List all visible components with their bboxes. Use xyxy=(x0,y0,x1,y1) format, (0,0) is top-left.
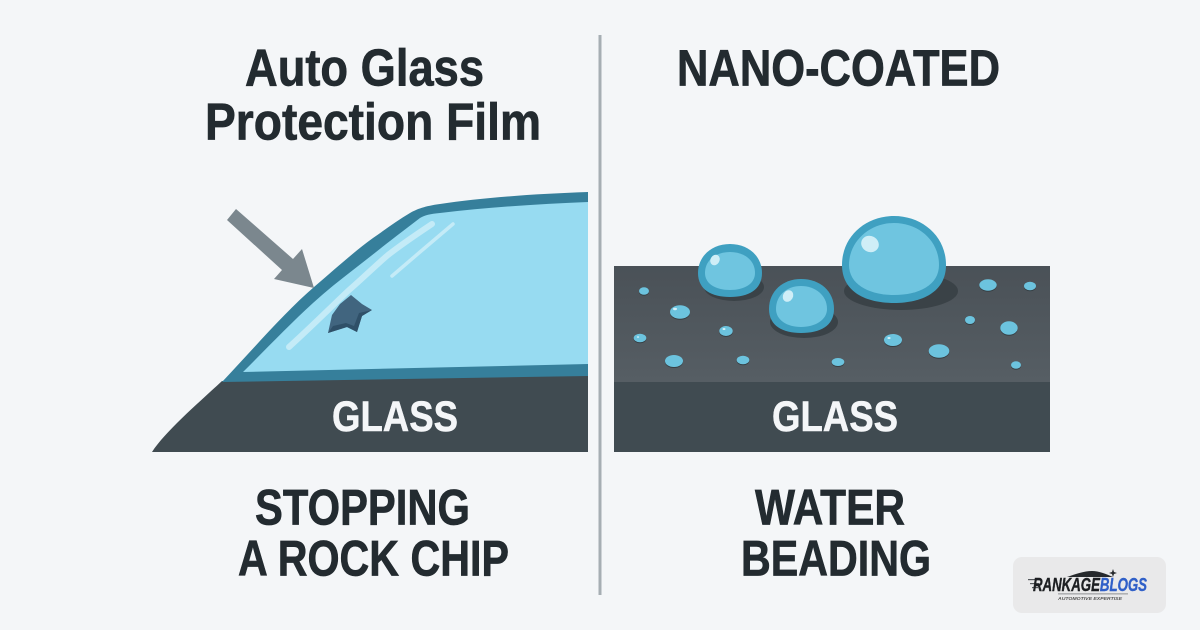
label: glass: GLASS xyxy=(772,393,898,441)
heading: nano-coated: NANO-COATED xyxy=(677,40,1000,96)
coated glass illustration xyxy=(614,216,1050,452)
left bead xyxy=(698,244,762,297)
car body xyxy=(152,375,588,452)
windshield glass xyxy=(243,202,588,372)
caption: water beading xyxy=(741,480,931,586)
heading: auto glass protection film: Protection Film xyxy=(205,94,541,152)
impact arrow xyxy=(227,209,314,288)
glass base xyxy=(614,382,1050,452)
caption: stopping a rock chip: A ROCK CHIP xyxy=(238,530,509,586)
caption: stopping a rock chip: STOPPING xyxy=(255,480,470,536)
panel: auto glass protection film xyxy=(152,40,588,586)
rock chip xyxy=(328,295,372,333)
middle bead xyxy=(769,279,834,333)
glass highlights xyxy=(289,224,453,347)
logo wordmark: RANKAGEBLOGS xyxy=(1033,575,1147,595)
windshield frame xyxy=(222,192,588,382)
logo car silhouette and sparkle xyxy=(1067,569,1117,577)
logo tagline: AUTOMOTIVE EXPERTISE xyxy=(1057,596,1123,601)
panel: nano-coated xyxy=(614,40,1050,586)
logo underline xyxy=(1058,592,1128,595)
large water beads xyxy=(698,216,958,338)
caption: water beading: BEADING xyxy=(741,530,931,586)
heading: auto glass protection film: Auto Glass xyxy=(245,40,484,98)
label: glass: GLASS xyxy=(332,393,458,441)
windshield illustration xyxy=(152,192,588,452)
coated surface xyxy=(614,266,1050,382)
logo badge: rankage blogs xyxy=(1013,557,1166,613)
heading: auto glass protection film xyxy=(205,40,541,152)
small water droplets xyxy=(634,279,1036,369)
caption: water beading: WATER xyxy=(755,480,905,536)
caption: stopping a rock chip xyxy=(238,480,509,586)
large bead xyxy=(842,216,946,303)
logo speed lines xyxy=(1028,579,1040,588)
droplet highlights xyxy=(637,308,891,339)
bead shadows xyxy=(704,272,958,338)
